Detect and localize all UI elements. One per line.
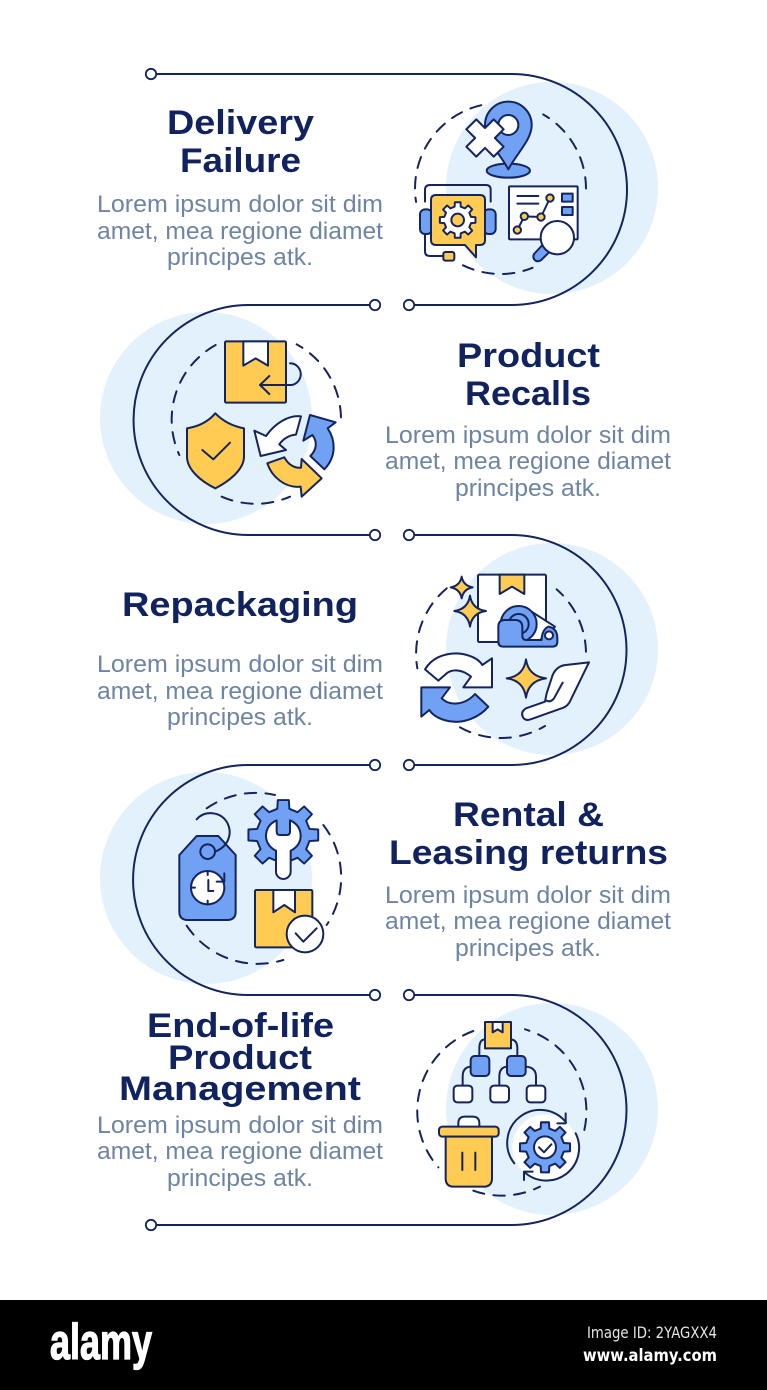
footer bar: [0, 1300, 767, 1390]
icon: refresh arrows: [421, 653, 492, 722]
panel: product recalls: [100, 300, 671, 540]
icon group: [416, 575, 589, 738]
connector line: [146, 990, 627, 1230]
body text: Lorem ipsum dolor sit dim: [97, 191, 383, 218]
icon: box with check badge: [255, 890, 323, 952]
icon group: [179, 793, 341, 964]
icon: analytics chart with magnifier: [509, 186, 578, 261]
dashed ring: [417, 1029, 586, 1196]
panel: rental and leasing returns: [100, 760, 671, 1000]
icon: support headset with gear: [420, 185, 496, 261]
body text: amet, mea regione diamet: [97, 1138, 383, 1165]
body text: Lorem ipsum dolor sit dim: [385, 882, 671, 909]
icon: box with tape dispenser: [478, 575, 557, 647]
heading: Rental &: [453, 796, 604, 834]
body text: principes atk.: [167, 244, 313, 271]
panel: repackaging: [97, 530, 658, 770]
body text: Lorem ipsum dolor sit dim: [97, 1112, 383, 1139]
body text: [385, 882, 671, 962]
body text: [97, 191, 383, 271]
icon group: [415, 102, 586, 274]
icon: hierarchy tree: [454, 1022, 545, 1102]
heading: [389, 796, 668, 872]
dashed ring: [416, 588, 586, 738]
body text: Lorem ipsum dolor sit dim: [385, 422, 671, 449]
background blob: [446, 82, 658, 294]
heading: Management: [119, 1070, 361, 1108]
panel: delivery failure: [97, 69, 658, 310]
icon group: [417, 1022, 586, 1196]
heading: [457, 337, 600, 413]
dashed ring: [187, 793, 341, 964]
heading: [119, 1007, 361, 1108]
panel: end-of-life product management: [97, 990, 658, 1230]
heading: Delivery: [167, 104, 314, 142]
connector line: [404, 530, 626, 770]
dashed ring: [415, 105, 586, 274]
image id: Image ID: 2YAGXX4: [587, 1323, 717, 1342]
website: www.alamy.com: [583, 1346, 717, 1366]
connector line: [134, 300, 380, 540]
body text: amet, mea regione diamet: [385, 448, 671, 475]
icon: sparkles: [451, 577, 546, 698]
body text: amet, mea regione diamet: [385, 908, 671, 935]
body text: principes atk.: [167, 1165, 313, 1192]
icon: recycle arrows: [254, 415, 336, 497]
body text: [97, 651, 383, 731]
heading: End-of-life: [147, 1007, 334, 1045]
body text: amet, mea regione diamet: [97, 218, 383, 245]
body text: principes atk.: [455, 475, 601, 502]
heading: Repackaging: [122, 586, 358, 624]
body text: [97, 1112, 383, 1192]
icon: open hand: [522, 662, 589, 720]
icon: box with return arrow: [225, 341, 301, 403]
heading: Product: [168, 1039, 312, 1077]
heading: Recalls: [465, 375, 591, 413]
icon: gear with wrench: [248, 800, 318, 879]
connector line: [133, 760, 380, 1000]
dashed ring: [172, 344, 341, 504]
body text: principes atk.: [167, 704, 313, 731]
connector line: [146, 69, 627, 310]
body text: amet, mea regione diamet: [97, 678, 383, 705]
background blob: [100, 772, 312, 984]
heading: Leasing returns: [389, 834, 668, 872]
logo wordmark: alamy: [50, 1314, 152, 1370]
background blob: [446, 1003, 658, 1215]
background blob: [446, 543, 658, 755]
body text: [385, 422, 671, 502]
heading: Product: [457, 337, 600, 375]
heading: [167, 104, 314, 180]
icon: cycle gear with check: [507, 1110, 579, 1181]
icon group: [172, 341, 341, 504]
icon: location pin with cross: [458, 102, 532, 178]
icon: shield with check: [187, 413, 244, 488]
icon: price tag with clock: [179, 813, 236, 920]
heading: Failure: [180, 142, 301, 180]
icon: trash can: [439, 1117, 499, 1187]
background blob: [100, 312, 312, 524]
body text: Lorem ipsum dolor sit dim: [97, 651, 383, 678]
body text: principes atk.: [455, 935, 601, 962]
